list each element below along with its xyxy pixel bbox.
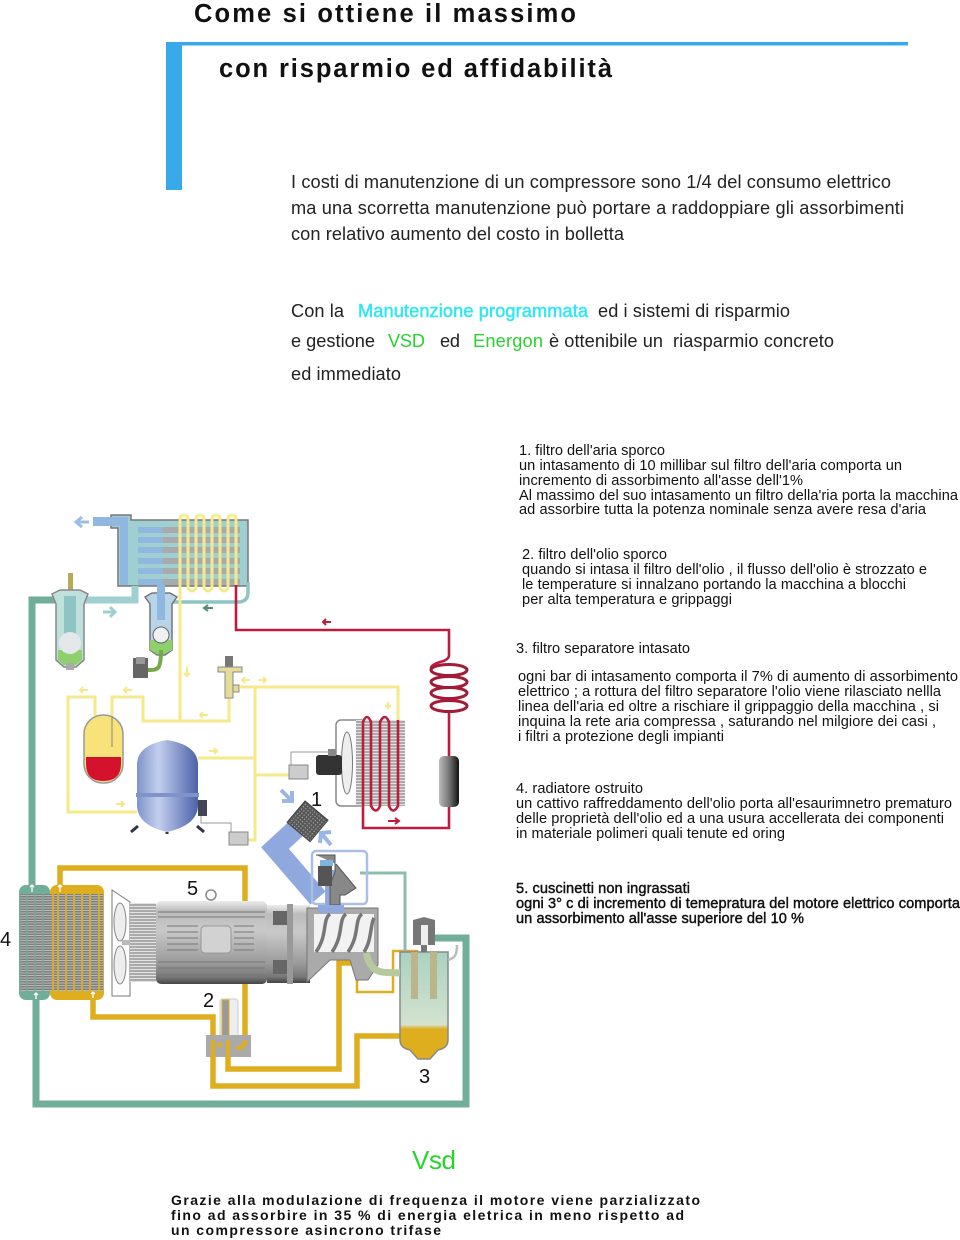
air filter right [133, 585, 177, 678]
note 1: air filter: 1. filtro dell'aria sporco [519, 443, 665, 459]
closing text: un compressore asincrono trifase [171, 1222, 441, 1238]
note 4: radiator [516, 781, 952, 842]
note 3: separator filter: i filtri a protezione degli impianti [518, 729, 724, 745]
diagram: screw compressor circuit [0, 789, 466, 1104]
savings text: ed [440, 331, 460, 351]
oil cooler [19, 885, 104, 1000]
component number labels [0, 789, 430, 1088]
intro text: I costi di manutenzione di un compressore sono 1/4 del consumo elettrico [291, 172, 891, 192]
savings text: è ottenibile un [549, 331, 663, 351]
note 3: separator filter: elettrico ; a rottura del filtro separatore l'olio viene rilasciato nellla [518, 684, 942, 700]
note 4: radiator: in materiale polimeri quali tenute ed oring [516, 826, 785, 842]
air intake duct [275, 825, 318, 898]
electric motor [156, 890, 267, 984]
note 1: air filter [519, 443, 959, 518]
main teal pipe [32, 600, 60, 885]
intro text [291, 172, 904, 244]
air filter element [287, 801, 328, 842]
savings text: e gestione [291, 331, 375, 351]
title: Come si ottiene il massimo [194, 0, 576, 28]
closing text [171, 1192, 700, 1238]
note 2: oil filter [522, 547, 927, 608]
savings text: Con la [291, 301, 345, 321]
closing text: Grazie alla modulazione di frequenza il motore viene parzializzato [171, 1192, 700, 1208]
diagram: dryer circuit [32, 515, 467, 885]
fan motor [289, 749, 342, 779]
oil separator [366, 917, 457, 1059]
component number labels: 5 [187, 878, 198, 900]
note 4: radiator: delle proprietà dell'olio ed a una usura accellerata dei componenti [516, 811, 944, 827]
title: con risparmio ed affidabilità [219, 55, 613, 83]
condenser unit [336, 717, 405, 810]
note 3: separator filter: inquina la rete aria compressa , saturando nel milgiore dei casi , [518, 714, 936, 730]
note 3: separator filter [516, 641, 958, 745]
red condenser coil [431, 664, 467, 712]
note 2: oil filter: per alta temperatura e grippaggi [522, 592, 732, 608]
closing text: fino ad assorbire in 35 % di energia eletrica in meno rispetto ad [171, 1207, 684, 1223]
expansion valve [218, 656, 242, 698]
note 1: air filter: incremento di assorbimento all'asse dell'1% [519, 473, 803, 489]
header accent bar [166, 42, 908, 190]
teal cooling loop [36, 938, 466, 1104]
savings text: ed immediato [291, 364, 401, 384]
gold oil lines [60, 868, 405, 1086]
Vsd heading: Vsd [412, 1145, 456, 1175]
refrigerant return line [172, 582, 248, 602]
note 2: oil filter: le temperature si innalzano portando la macchina a blocchi [522, 577, 906, 593]
component number labels: 2 [203, 990, 214, 1012]
intake arrows [281, 790, 331, 845]
note 5: bearings: ogni 3° c di incremento di temepratura del motore elettrico comporta [516, 896, 960, 912]
savings text: ed i sistemi di risparmio [598, 301, 790, 321]
title [194, 0, 613, 83]
savings text: Manutenzione programmata [358, 301, 589, 321]
note 2: oil filter: 2. filtro dell'olio sporco [522, 547, 667, 563]
dryer heat exchanger [93, 515, 248, 586]
savings text: VSD [388, 331, 425, 351]
note 4: radiator: 4. radiatore ostruito [516, 781, 643, 797]
component number labels: 3 [419, 1066, 430, 1088]
savings text: riasparmio concreto [673, 331, 834, 351]
thin teal control line [360, 873, 405, 952]
light teal air pipes [60, 586, 135, 600]
liquid separator tank [84, 715, 123, 783]
component number labels: 1 [311, 789, 322, 811]
refrigerant compressor [131, 740, 248, 845]
air filter left [52, 573, 88, 670]
oil filter [206, 999, 251, 1057]
receiver [439, 756, 459, 807]
note 4: radiator: un cattivo raffreddamento dell'olio porta all'esaurimnetro prematuro [516, 796, 952, 812]
flow arrows: air and refrigerant [76, 517, 399, 824]
savings text: Energon [473, 331, 543, 351]
component number labels: 4 [0, 929, 11, 951]
note 2: oil filter: quando si intasa il filtro dell'olio , il flusso dell'olio è strozzato e [522, 562, 927, 578]
yellow dryer coil [180, 515, 236, 721]
intro text: ma una scorretta manutenzione può portare a raddoppiare gli assorbimenti [291, 198, 904, 218]
note 3: separator filter: ogni bar di intasamento comporta il 7% di aumento di assorbimento [518, 669, 958, 685]
yellow refrigerant lines [68, 687, 398, 840]
note 5: bearings [516, 881, 960, 927]
intro text: con relativo aumento del costo in bolletta [291, 224, 625, 244]
note 5: bearings: 5. cuscinetti non ingrassati [516, 881, 690, 897]
red high pressure line [236, 585, 449, 828]
savings text [291, 301, 834, 384]
motor fins [130, 903, 156, 982]
screw element [307, 908, 378, 982]
note 5: bearings: un assorbimento all'asse superiore del 10 % [516, 911, 804, 927]
note 3: separator filter: 3. filtro separatore intasato [516, 641, 690, 657]
motor fan [112, 890, 132, 996]
intake valve [312, 851, 367, 913]
compressor coupling [267, 904, 310, 984]
note 3: separator filter: linea dell'aria ed oltre a rischiare il grippaggio della macchina , si [518, 699, 939, 715]
note 1: air filter: Al massimo del suo intasamento un filtro della'ria porta la macchina [519, 488, 959, 504]
thin gold separator line [357, 951, 417, 1000]
note 1: air filter: un intasamento di 10 millibar sul filtro dell'aria comporta un [519, 458, 902, 474]
note 1: air filter: ad assorbire tutta la potenza nominale senza avere resa d'aria [519, 502, 927, 518]
